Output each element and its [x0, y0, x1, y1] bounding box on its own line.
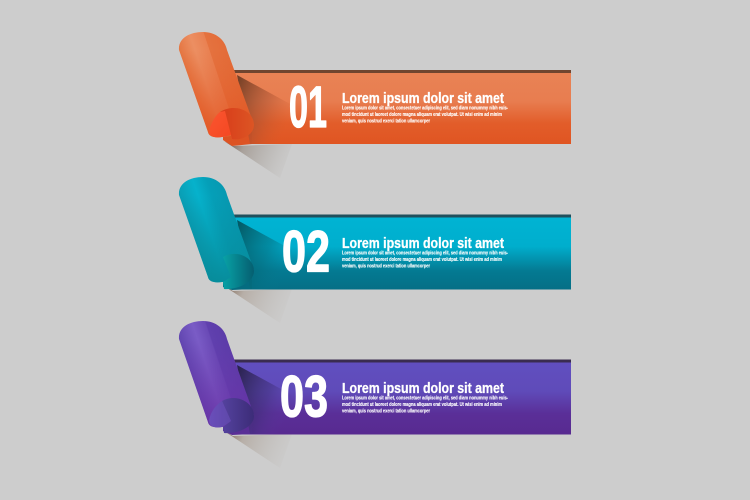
roll opening inner 03: [222, 398, 254, 433]
ground shadow 03: [224, 431, 292, 468]
ribbon top edge 03: [234, 360, 571, 362]
roll body 01: [179, 32, 254, 137]
lower flap 02: [223, 275, 252, 290]
heading 02: Lorem ipsum dolor sit amet: [342, 235, 504, 252]
heading 01: Lorem ipsum dolor sit amet: [342, 90, 504, 107]
ribbon band 01: [234, 70, 571, 144]
roll body 03: [179, 321, 254, 427]
number 01: 01: [289, 75, 327, 140]
ground shadow 01: [224, 141, 292, 178]
ribbon top edge 01: [234, 70, 571, 73]
ribbon band 03: [234, 360, 571, 434]
roll opening inner 02: [223, 254, 254, 289]
body text 01: veniam, quis nostrud exerci tation ullamcorper: [342, 118, 430, 124]
body text 01: Lorem ipsum dolor sit amet, consectetuer adipiscing elit, sed diam nonummy nibh euis-: [342, 106, 508, 112]
lower flap 01: [223, 130, 252, 146]
body text 03: Lorem ipsum dolor sit amet, consectetuer adipiscing elit, sed diam nonummy nibh euis-: [342, 396, 508, 402]
number 02: 02: [282, 220, 330, 284]
body text 03: mod tincidunt ut laoreet dolore magna aliquam erat volutpat. Ut wisi enim ad minim: [342, 402, 502, 408]
ribbon band 02: [234, 215, 571, 290]
roll opening inner 01: [220, 108, 254, 139]
body text 03: veniam, quis nostrud exerci tation ullamcorper: [342, 408, 430, 414]
ground shadow 02: [224, 286, 292, 323]
fold shadow 03: [237, 365, 292, 434]
roll shading 01: [179, 32, 254, 137]
fold shadow 02: [237, 220, 292, 289]
roll body 02: [179, 177, 254, 282]
body text 02: [342, 250, 508, 270]
body text 02: Lorem ipsum dolor sit amet, consectetuer adipiscing elit, sed diam nonummy nibh euis-: [342, 250, 508, 256]
banner 02: teal: [179, 177, 571, 323]
number 03: 03: [280, 364, 328, 430]
roll opening left 03: [209, 401, 231, 427]
body text 02: mod tincidunt ut laoreet dolore magna aliquam erat volutpat. Ut wisi enim ad minim: [342, 257, 502, 263]
body text 01: mod tincidunt ut laoreet dolore magna aliquam erat volutpat. Ut wisi enim ad minim: [342, 112, 502, 118]
roll opening bright 01: [209, 111, 231, 137]
roll shading 02: [179, 177, 254, 282]
ribbon top edge 02: [234, 214, 571, 218]
banner 03: purple: [179, 321, 571, 468]
body text 01: [342, 106, 508, 124]
banner 01: orange: [179, 32, 571, 178]
roll shading 03: [179, 321, 254, 427]
fold shadow 01: [237, 75, 292, 144]
lower flap 03: [223, 420, 252, 435]
body text 03: [342, 396, 508, 414]
body text 02: veniam, quis nostrud exerci tation ullamcorper: [342, 264, 430, 270]
heading 03: Lorem ipsum dolor sit amet: [342, 380, 504, 397]
